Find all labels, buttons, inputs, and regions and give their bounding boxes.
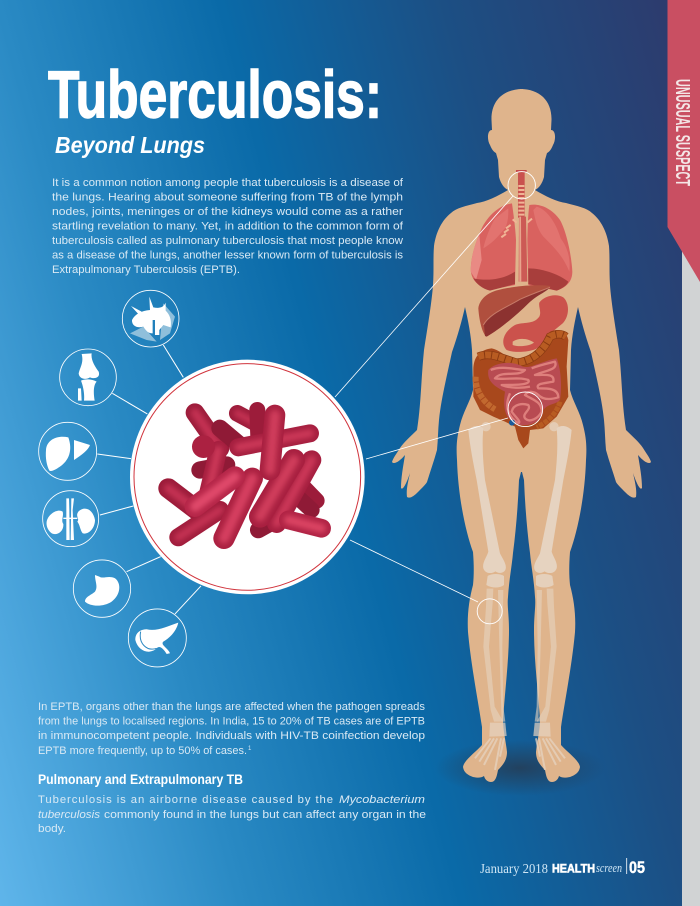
icon: adrenal gland	[122, 290, 179, 347]
section ribbon: UNUSUAL SUSPECT	[671, 79, 693, 186]
body silhouette	[392, 89, 651, 782]
intro paragraph: startling revelation to many. Yet, in addition to the common form of	[52, 220, 404, 232]
hip and leg bones	[468, 422, 572, 770]
third paragraph: body.	[38, 823, 66, 835]
section heading: Pulmonary and Extrapulmonary TB	[38, 772, 243, 787]
bacteria callout with icons	[39, 290, 365, 667]
large intestine	[473, 330, 568, 448]
small intestine	[488, 358, 561, 425]
stomach	[503, 295, 568, 352]
title: Tuberculosis:	[48, 58, 382, 132]
second paragraph: in immunocompetent people. Individuals with HIV-TB coinfection develop	[38, 730, 425, 742]
footer: 05	[629, 859, 645, 877]
second paragraph: In EPTB, organs other than the lungs are affected when the pathogen spreads	[38, 701, 425, 713]
footer	[480, 858, 645, 877]
subtitle: Beyond Lungs	[55, 132, 205, 158]
bladder detail	[509, 420, 515, 426]
second paragraph: EPTB more frequently, up to 50% of cases.	[38, 745, 247, 757]
intro paragraph: the lungs. Hearing about someone suffering from TB of the lymph	[52, 192, 403, 204]
connector lines and target markers	[335, 172, 543, 624]
third paragraph: commonly found in the lungs but can affect any organ in the	[104, 809, 426, 821]
third paragraph: Tuberculosis is an airborne disease caused by the	[38, 794, 333, 806]
icon: liver	[39, 422, 97, 480]
floor shadow under feet	[435, 740, 605, 796]
lungs	[471, 203, 572, 291]
intestines	[473, 330, 568, 448]
third paragraph: tuberculosis	[38, 809, 100, 821]
icon connector lines	[97, 345, 201, 614]
white bacteria circle	[130, 360, 365, 594]
third paragraph	[38, 794, 426, 835]
footer: HEALTH	[552, 862, 595, 876]
intro paragraph: as a disease of the lungs, another lesser known form of tuberculosis is	[52, 250, 403, 262]
second paragraph: from the lungs to localised regions. In India, 15 to 20% of TB cases are of EPTB	[38, 716, 425, 728]
trachea	[501, 170, 532, 282]
liver	[478, 285, 551, 337]
internal organs	[471, 170, 572, 352]
third paragraph: Mycobacterium	[339, 794, 425, 806]
icon: knee joint	[60, 349, 116, 406]
second paragraph: 1	[248, 746, 252, 752]
intro paragraph: It is a common notion among people that tuberculosis is a disease of	[52, 177, 404, 189]
intro paragraph	[52, 177, 404, 276]
intro paragraph: nodes, joints, meninges or of the kidneys would come as a rather	[52, 206, 403, 218]
footer: screen	[596, 860, 622, 875]
intro paragraph: tuberculosis called as pulmonary tuberculosis that most people know	[52, 235, 404, 247]
section ribbon	[668, 0, 700, 282]
grey side strip	[682, 0, 700, 906]
intro paragraph: Extrapulmonary Tuberculosis (EPTB).	[52, 264, 240, 276]
human body figure	[392, 89, 651, 796]
icon: kidneys	[43, 491, 99, 547]
second paragraph	[38, 701, 425, 757]
icon: pancreas	[128, 609, 186, 667]
bacteria cluster	[168, 410, 322, 538]
icon: stomach	[73, 560, 131, 617]
footer: January 2018	[480, 862, 548, 877]
